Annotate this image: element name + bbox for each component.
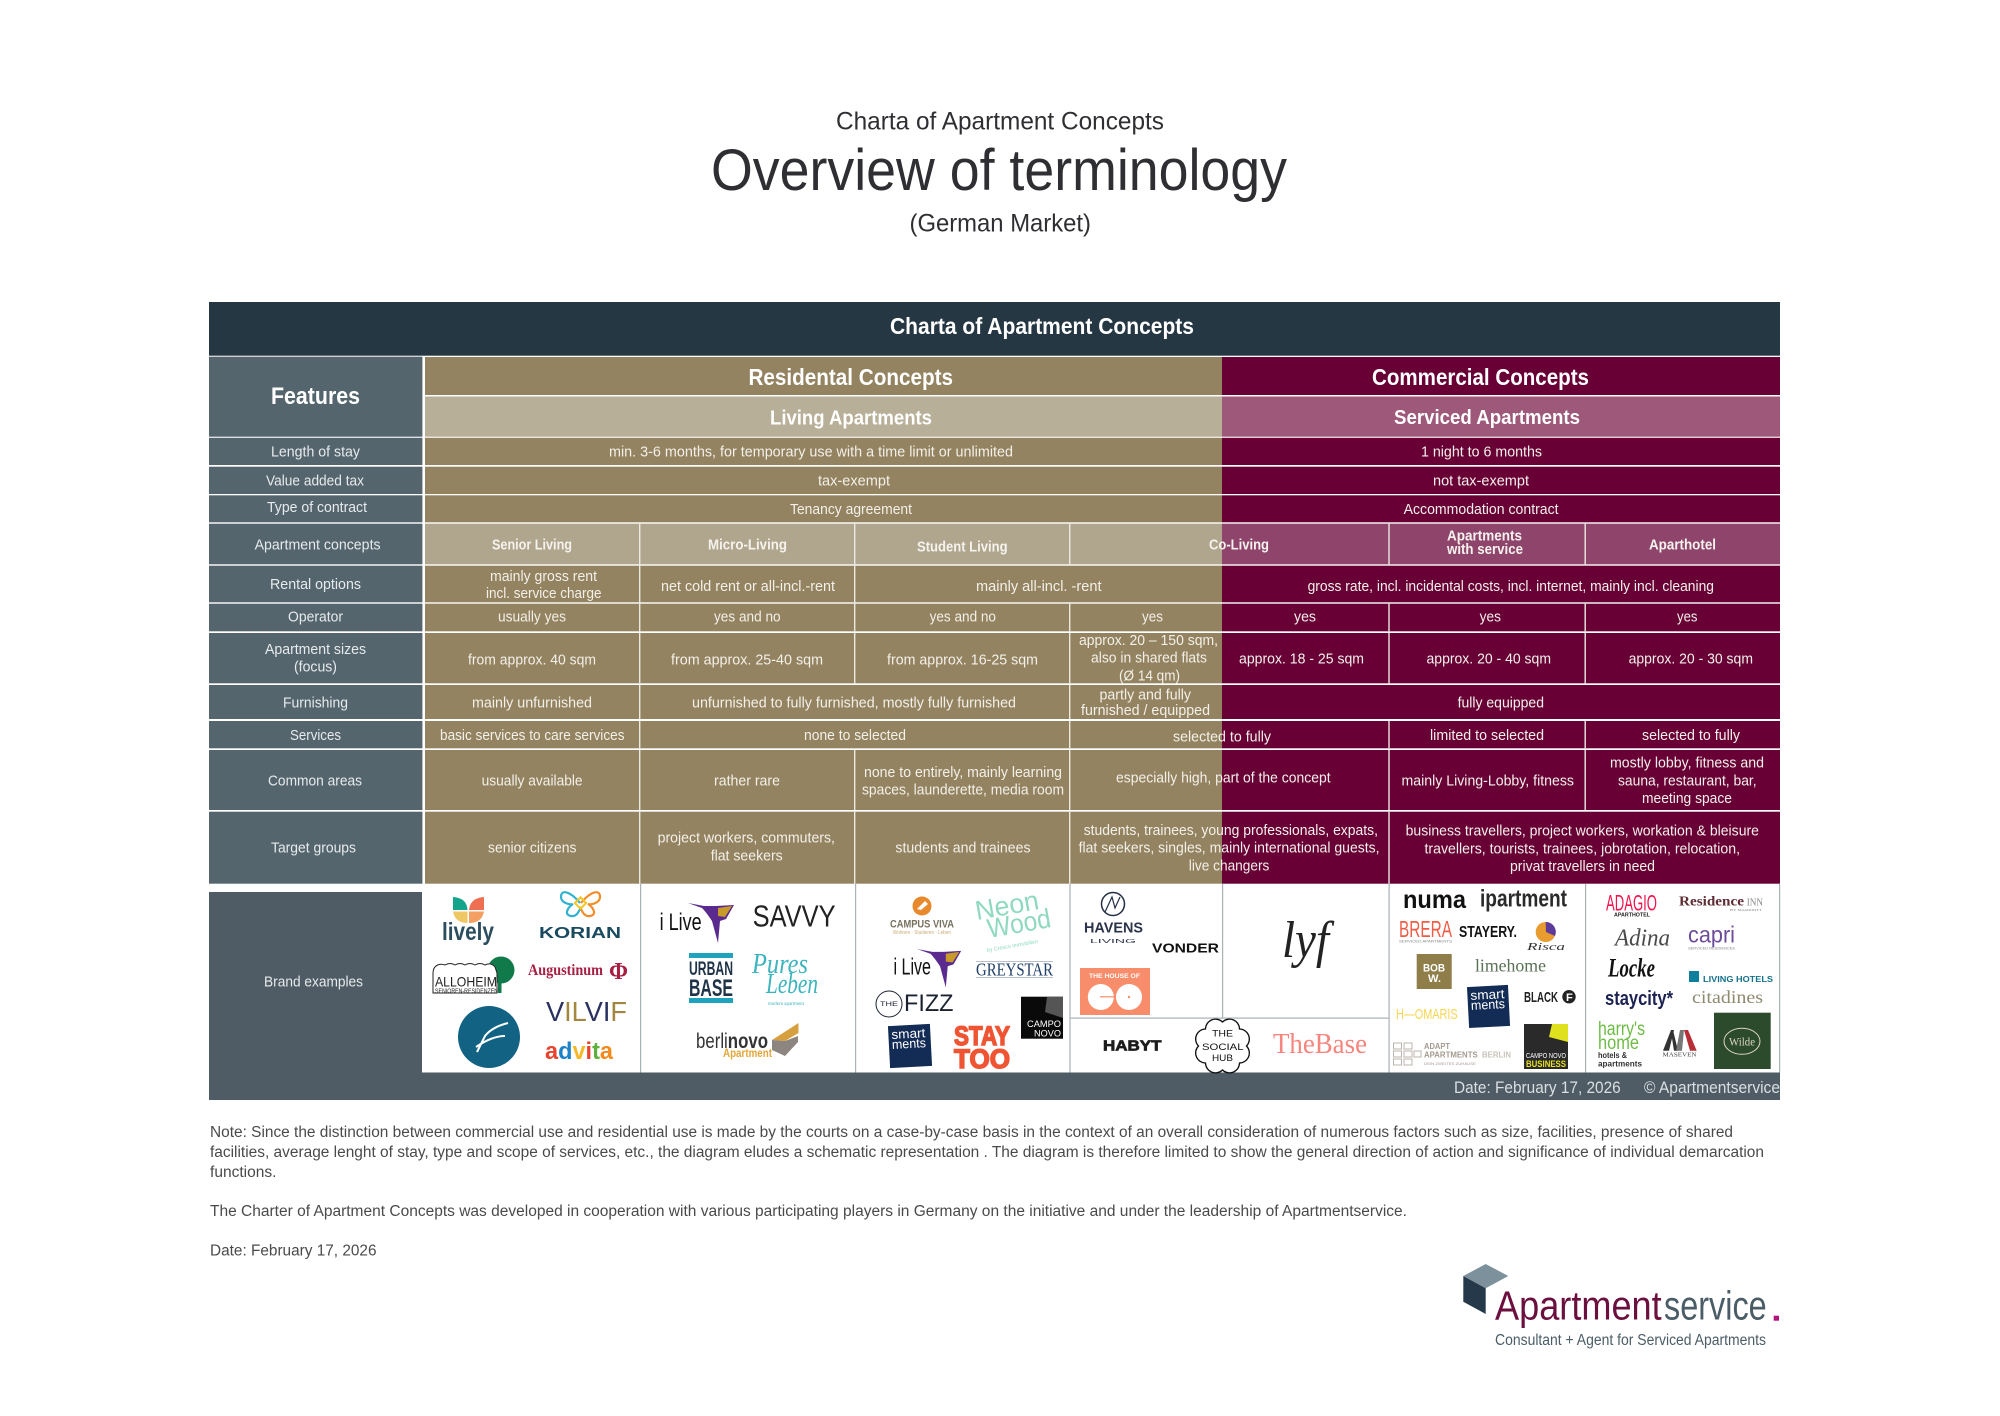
logo: smartments [888,1024,932,1068]
logo: The Social Hub: HUB [1212,1053,1233,1064]
logo: Risa: Risca [1525,941,1566,953]
logo: The Fizz: FIZZ [904,990,954,1017]
logo: limehome: limehome [1475,956,1546,976]
row: target groups: business travellers, project workers, workation & bleisure [1406,823,1759,839]
logo: iLive: i Live [894,953,931,979]
logo: Maseven [1662,1030,1697,1059]
row: apartment concepts: Apartments [1447,529,1522,545]
living and serviced apartments header [425,396,1780,437]
title block [711,108,1287,238]
logo: Adapt Apartments Berlin: ADAPT [1424,1041,1451,1051]
residential and commercial concepts header [425,357,1780,395]
logo: Adagio: ADAGIO [1606,891,1657,916]
row: common areas: Common areas [268,774,362,790]
row: common areas: spaces, launderette, media room [862,783,1064,799]
row: common areas: especially high, part of the concept [1116,771,1331,787]
logo: berlinovo: berlinovo [696,1030,768,1053]
logo: lyf: lyf [1282,912,1335,969]
logo: Bob W [1417,954,1452,989]
row: furnishing: partly and fully [1100,687,1192,703]
logo: Wilde: Wilde [1729,1034,1755,1048]
residential and commercial concepts header: Commercial Concepts [1372,364,1589,390]
features header: Features [271,383,360,410]
logo: Campus Viva [890,896,954,936]
row: apartment concepts: Senior Living [492,538,572,554]
logo: Black F: BLACK [1524,989,1558,1006]
logo: Harry's Home: harry's [1598,1019,1645,1040]
row: target groups: privat travellers in need [1510,859,1655,875]
logo: Harry's Home [1598,1019,1645,1068]
row: rental options: mainly all-incl. -rent [976,579,1102,595]
note text: Date: February 17, 2026 [210,1243,376,1260]
logo: lively: lively [442,918,494,946]
row: common areas: none to entirely, mainly learning [864,765,1062,781]
living and serviced apartments header: Living Apartments [770,408,932,430]
row: brand examples label and footer bar: Brand examples [264,975,363,991]
logo: berlinovo: Apartment [723,1048,772,1060]
logos: apartments with service [1394,886,1576,1069]
row: apartment sizes: approx. 20 - 40 sqm [1426,652,1551,668]
row: furnishing: furnished / equipped [1081,703,1210,719]
logo: lively [442,897,494,946]
logo: Pures Leben: Leben [765,969,818,1000]
row: apartment sizes: from approx. 16-25 sqm [887,652,1038,668]
logo: Adagio [1606,891,1657,918]
row: apartment sizes [209,633,1780,685]
logo: Campo Novo: CAMPO [1027,1019,1061,1030]
row: apartment sizes: (Ø 14 qm) [1119,669,1180,685]
logo: Harry's Home: apartments [1598,1060,1643,1068]
row: operator: yes and no [930,610,996,626]
logo area cell dividers [640,884,1780,1072]
row: apartment sizes: approx. 20 - 30 sqm [1629,652,1753,668]
logo: The House of Co [1080,968,1150,1015]
row: furnishing [209,685,1780,719]
logo: ipartment: ipartment [1480,886,1567,913]
logo: Adagio: APARTHOTEL [1614,912,1650,918]
row: type of contract: Type of contract [267,500,367,516]
logo: Campo Novo Business [1524,1024,1568,1069]
logo: The Social Hub [1196,1019,1249,1073]
row: operator: Operator [288,610,343,626]
logos: micro-living [660,899,836,1060]
panel: charter table [209,302,1780,1100]
logo: Capri: capri [1688,922,1735,948]
table title band: Charta of Apartment Concepts [890,313,1194,339]
note text: Note: Since the distinction between commercial use and residential use is made by the courts on a case-by-case basis in the context of an overall consideration of numerous factors such as size, facilities, presence of shared [210,1124,1733,1141]
row: apartment sizes: approx. 20 – 150 sqm, [1079,633,1218,649]
logo: iLive [894,949,961,987]
row: common areas: rather rare [714,774,780,790]
row: target groups: students and trainees [895,841,1031,857]
logo: Havens Living [1084,892,1143,945]
row: length of stay: min. 3-6 months, for temporary use with a time limit or unlimited [609,445,1013,461]
row: rental options [209,566,1780,602]
logo: smartments [1467,985,1510,1028]
row: services: selected to fully [1642,728,1741,744]
logo: Capri: SERVICED RESIDENCES [1688,946,1736,950]
row: target groups [209,812,1780,884]
row: services: selected to fully [1173,730,1272,746]
row: target groups: live changers [1189,859,1269,875]
row: target groups: flat seekers, singles, mainly international guests, [1079,841,1380,857]
row: brand examples label and footer bar [209,892,1780,1100]
row: apartment concepts [209,524,1780,564]
company logo: Apartmentservice [1463,1264,1779,1349]
row: brand examples label and footer bar: © Apartmentservice [1644,1078,1780,1097]
logo: Urban Base [689,953,733,1003]
row: common areas: mostly lobby, fitness and [1610,756,1764,772]
logo: Campo Novo Business: BUSINESS [1526,1059,1566,1069]
logo: Campus Viva: Wohnen · Studieren · Leben [893,930,951,936]
row: operator: yes [1294,610,1316,626]
title block: Overview of terminology [711,138,1287,203]
row: length of stay [209,438,1780,465]
logo: smartments: ments [1471,996,1506,1013]
row: rental options: mainly gross rent [490,569,597,585]
logo: Living Hotels: LIVING HOTELS [1703,974,1773,984]
logo: Risa [1525,922,1566,953]
logo: blue circle with F [458,1006,520,1068]
row: apartment concepts: Micro-Living [708,538,787,554]
row: length of stay: 1 night to 6 months [1421,445,1542,461]
logo: Campo Novo: NOVO [1034,1029,1061,1040]
logo: Savvy: SAVVY [753,899,836,934]
logo: Adapt Apartments Berlin [1394,1041,1511,1066]
logo: Staycity: staycity* [1605,988,1673,1010]
logo: Residence Inn [1679,894,1763,912]
row: value added tax: not tax-exempt [1433,474,1529,490]
logo: Vilvif: VILVIF [546,996,627,1027]
logo: Stay Too [954,1021,1010,1074]
logo: Bob W: W. [1428,973,1441,985]
logo: Havens Living: LIVING [1090,939,1136,945]
row: rental options: gross rate, incl. incidental costs, incl. internet, mainly incl. cleaning [1308,579,1714,595]
row: furnishing: mainly unfurnished [472,696,592,712]
row: value added tax: Value added tax [266,474,365,490]
row: type of contract [209,495,1780,522]
row: target groups: senior citizens [488,841,576,857]
logo: Vonder: VONDER [1152,941,1220,956]
logo: Pures Leben: modern apartment [768,1002,805,1007]
row: apartment concepts: Apartment concepts [255,538,381,554]
logo: Urban Base: URBAN [689,959,733,980]
row: operator: yes [1480,610,1501,626]
logo: Alloheim: ALLOHEIM [435,974,497,990]
row: apartment concepts: Co-Living [1209,538,1269,554]
row: rental options: net cold rent or all-incl.-rent [661,579,835,595]
logo: Korian [539,892,621,942]
row: value added tax [209,467,1780,494]
logo: The Fizz: THE [880,1001,899,1008]
logo: Advita: advita [545,1038,614,1065]
logo: Residence Inn: BY MARRIOTT [1730,908,1763,912]
row: apartment sizes: from approx. 25-40 sqm [671,652,823,668]
row: furnishing: unfurnished to fully furnished, mostly fully furnished [692,696,1016,712]
logo: Maseven: MASEVEN [1662,1052,1697,1059]
logo: iLive: i Live [660,909,702,936]
row: apartment concepts: with service [1446,542,1523,558]
features header [209,357,422,437]
logo: Campo Novo Business: CAMPO NOVO [1526,1053,1566,1060]
row: services [209,721,1780,748]
row: operator: yes and no [714,610,781,626]
logo: TheBase: TheBase [1273,1029,1367,1060]
row: type of contract: Tenancy agreement [790,502,912,518]
logo: Augustinum [528,959,628,985]
row: services: none to selected [804,728,906,744]
row: apartment sizes: also in shared flats [1091,651,1207,667]
row: common areas: meeting space [1642,791,1732,807]
logo: Adapt Apartments Berlin: APARTMENTS [1424,1050,1478,1060]
logo: Greystar: GREYSTAR [976,960,1053,980]
living and serviced apartments header: Serviced Apartments [1394,407,1580,429]
logo: Urban Base: BASE [689,975,733,1002]
logo: The Social Hub: SOCIAL [1202,1042,1244,1053]
logos: senior living [433,892,628,1068]
logo: Brera: BRERA [1399,916,1452,942]
company logo: Apartmentservice: service [1664,1282,1767,1328]
row: services: Services [290,728,341,744]
row: services: limited to selected [1430,728,1544,744]
row: operator: yes [1677,610,1698,626]
logo: Stayery: STAYERY. [1459,924,1517,941]
row: rental options: Rental options [270,577,361,593]
note text [210,1124,1764,1260]
logo: Stay Too: STAY [954,1021,1010,1051]
logo: Brera [1399,916,1452,944]
row: length of stay: Length of stay [271,445,361,461]
row: apartment concepts: Student Living [917,540,1008,556]
row: operator: yes [1142,610,1163,626]
logo: Neon Wood [973,885,1053,954]
row: common areas: sauna, restaurant, bar, [1618,774,1757,790]
logo: The House of Co: THE HOUSE OF [1089,973,1140,980]
row: common areas: mainly Living-Lobby, fitness [1402,774,1574,790]
logo: Augustinum: Φ [609,959,628,985]
row: operator: usually yes [498,610,566,626]
logo: Homaris: H—OMARIS [1396,1006,1458,1023]
logo: Alloheim: SENIOREN-RESIDENZEN [435,989,498,995]
logo: smartments: smart [1470,986,1505,1003]
row: common areas: usually available [482,774,583,790]
logo: Harry's Home: home [1598,1033,1639,1054]
logo: Black F: F [1566,992,1573,1004]
row: common areas [209,750,1780,810]
logo: Campo Novo [1021,997,1063,1040]
logos: student living [876,885,1063,1074]
row: target groups: flat seekers [711,849,783,865]
logo: Neon Wood: Neon [973,885,1041,926]
logo: smartments: smart [891,1025,926,1042]
logo: Residence Inn: INN [1747,898,1763,909]
logo: Havens Living: HAVENS [1084,920,1143,937]
title block: (German Market) [910,210,1091,238]
row: operator [209,604,1780,631]
residential and commercial concepts header: Residental Concepts [748,364,953,390]
logo: Stay Too: TOO [954,1044,1010,1074]
logo: Locke: Locke [1607,954,1655,983]
row: apartment sizes: from approx. 40 sqm [468,652,596,668]
note text: facilities, average lenght of stay, type and scope of services, etc., the diagram eludes a schematic representation . The diagram is therefore limited to show the general direction of action and significance of individual demarcation [210,1144,1764,1161]
note text: functions. [210,1164,276,1181]
logos: aparthotel [1598,891,1773,1069]
row: apartment sizes: approx. 18 - 25 sqm [1239,652,1364,668]
company logo: Apartmentservice: Apartment [1495,1282,1662,1328]
logo: Alloheim [433,956,514,995]
logo: Habyt: HABYT [1103,1038,1162,1055]
logo: Wilde [1714,1013,1771,1069]
logo: Harry's Home: hotels & [1598,1051,1627,1060]
row: target groups: travellers, tourists, trainees, jobrotation, relocation, [1424,841,1740,857]
logo: Living Hotels [1689,971,1773,984]
logo: Pures Leben: Pures [751,949,808,980]
row: brand examples label and footer bar: Date: February 17, 2026 [1454,1078,1621,1097]
row: services: basic services to care services [440,728,624,744]
row: type of contract: Accommodation contract [1404,502,1559,518]
logo: Adapt Apartments Berlin: DEIN ZWEITES ZUHAUSE [1424,1061,1476,1066]
logo: Bob W: BOB [1423,963,1445,975]
logo: iLive [660,903,734,943]
note text: The Charter of Apartment Concepts was developed in cooperation with various participating players in Germany on the initiative and under the leadership of Apartmentservice. [210,1203,1407,1220]
row: apartment sizes: Apartment sizes [265,642,366,658]
company logo: Apartmentservice: Consultant + Agent for Serviced Apartments [1495,1332,1766,1349]
row: rental options: incl. service charge [486,586,602,602]
logo: smartments: ments [892,1035,927,1052]
logo: Pures Leben [751,949,818,1007]
logo: Brera: SERVICED APARTMENTS [1399,938,1452,944]
logo: numa: numa [1403,886,1467,914]
logo: Neon Wood: Wood [985,903,1053,944]
row: apartment concepts: Aparthotel [1649,538,1716,554]
row: furnishing: fully equipped [1458,695,1544,711]
logo: Adina: Adina [1613,926,1670,952]
row: value added tax: tax-exempt [818,474,890,490]
logo: Neon Wood: by Cresco Immobilien [986,939,1039,954]
logo: Korian: KORIAN [539,925,621,942]
table title band [209,302,1780,356]
logos: co-living [1080,892,1367,1073]
logo: Residence Inn: Residence [1679,894,1744,909]
logo: Campus Viva: CAMPUS VIVA [890,919,954,931]
logo: The Social Hub: THE [1212,1029,1233,1040]
row: apartment sizes: (focus) [294,660,337,676]
icon: cube [1463,1264,1508,1314]
logo: The Fizz [876,990,954,1017]
logo: Adapt Apartments Berlin: BERLIN [1482,1050,1511,1060]
title block: Charta of Apartment Concepts [836,108,1164,136]
logo: berlinovo [696,1023,798,1060]
row: target groups: project workers, commuters, [658,831,835,847]
row: furnishing: Furnishing [283,696,348,712]
logo: Augustinum: Augustinum [528,962,604,979]
row: target groups: Target groups [271,841,356,857]
logo: Citadines: citadines [1692,987,1763,1007]
row: target groups: students, trainees, young professionals, expats, [1084,823,1378,839]
